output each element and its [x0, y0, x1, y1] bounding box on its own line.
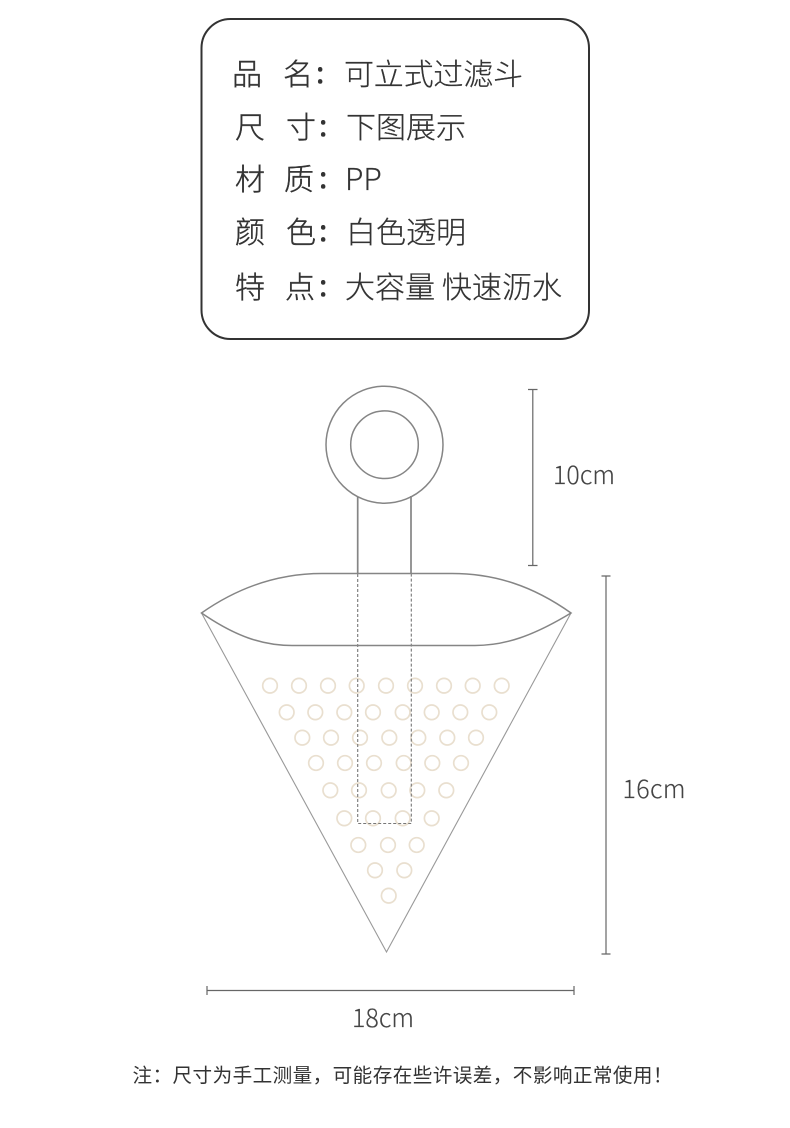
- dimension: funnel height 16cm: 16cm: [622, 770, 686, 806]
- dimension: hook height 10cm: 10cm: [553, 456, 615, 492]
- spec row: size: 尺: [235, 103, 265, 147]
- spec row: features: 特: [235, 263, 265, 307]
- dimension: funnel width 18cm: 18cm: [352, 999, 414, 1035]
- spec row: size: 寸: [286, 103, 316, 147]
- spec row: size: :: [319, 101, 327, 145]
- spec row: size: 下图展示: [346, 103, 466, 147]
- strainer drawing: [202, 386, 571, 952]
- hidden hook stem (dashed): [358, 574, 411, 824]
- spec row: name: :: [316, 48, 324, 92]
- spec row: name: 品: [232, 50, 262, 94]
- spec row: name: 可立式过滤斗: [344, 50, 523, 94]
- hook outer ring: [326, 386, 443, 503]
- funnel cone outline: [202, 613, 571, 952]
- spec row: material: :: [319, 153, 327, 197]
- dimension: funnel height 16cm: [602, 576, 686, 954]
- spec row: material: 质: [284, 155, 314, 199]
- panel frame: [202, 19, 589, 339]
- spec row: features: [235, 261, 562, 307]
- hook inner ring: [351, 411, 418, 479]
- spec row: colour: 色: [286, 208, 316, 252]
- spec row: colour: [235, 206, 466, 252]
- spec row: name: 名: [283, 50, 313, 94]
- panel: product specifications: [202, 19, 589, 339]
- spec row: colour: 白色透明: [346, 208, 466, 252]
- spec row: features: 点: [285, 263, 315, 307]
- filter holes: [263, 678, 509, 903]
- spec row: colour: :: [319, 206, 327, 250]
- dimension: funnel width 18cm: [207, 986, 574, 1035]
- spec row: material: PP: [345, 155, 382, 199]
- spec row: features: 大容量 快速沥水: [345, 263, 562, 307]
- spec row: material: 材: [235, 155, 265, 199]
- hook handle: [358, 496, 411, 574]
- spec row: colour: 颜: [235, 208, 265, 252]
- dimension: hook height 10cm: [528, 390, 615, 566]
- spec row: size: [235, 101, 466, 147]
- footnote: 注：尺寸为手工测量，可能存在些许误差，不影响正常使用！: [132, 1059, 672, 1088]
- funnel rim: [202, 574, 571, 646]
- spec row: features: :: [319, 261, 327, 305]
- spec row: name: [232, 48, 523, 94]
- spec row: material: [235, 153, 382, 199]
